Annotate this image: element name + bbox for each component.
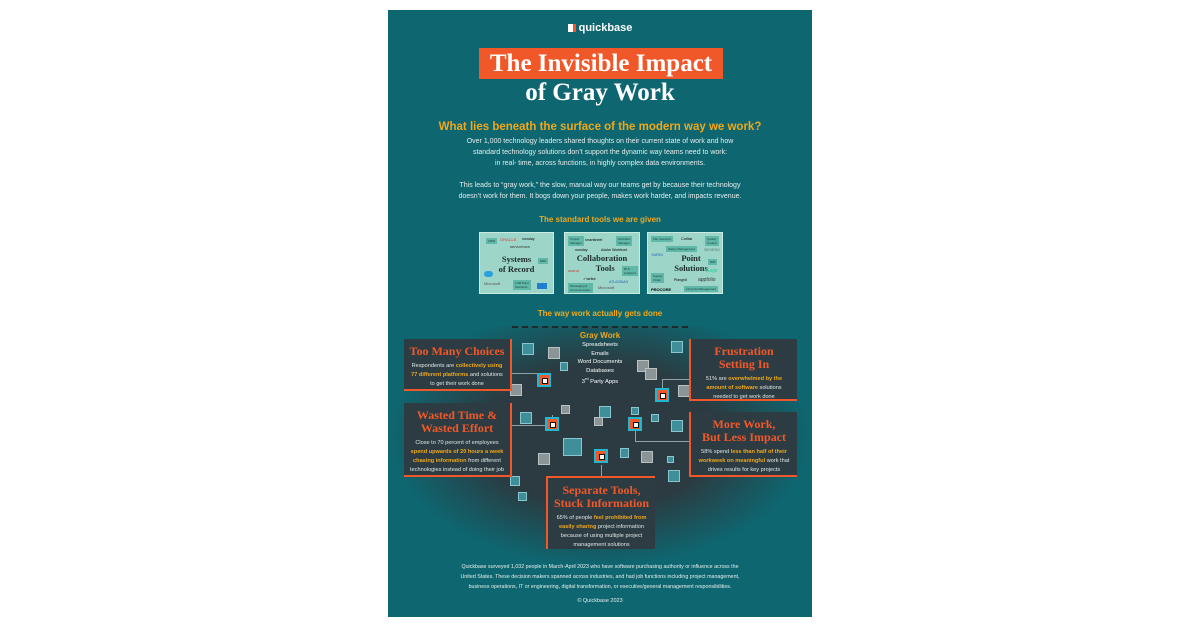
- tool card: point solutions: Supply: [653, 274, 662, 278]
- title: The Invisible Impact: [490, 50, 712, 77]
- dark gray work region: [388, 326, 812, 576]
- tool card: systems of record: ERP: [540, 259, 546, 263]
- tool card: point solutions: Safety Management: [668, 247, 695, 251]
- card: frustration: 51% are overwhelmed by the amount of software solutions needed to get work done: [706, 376, 782, 400]
- tool card: systems of record: servicenow: [510, 244, 530, 249]
- poster: [388, 10, 812, 617]
- card: too many choices: Too Many Choices: [410, 344, 504, 358]
- tool card: point solutions: Plangrid: [674, 278, 687, 282]
- tool card: systems of record: Systems: [502, 254, 531, 264]
- tool card: point solutions: Sage: [706, 268, 718, 274]
- footer methodology: United States. These decision makers spanned across industries, and had job functions including project management,: [460, 574, 740, 580]
- tool card: point solutions: SIEMENS: [704, 248, 720, 252]
- subtitle: of Gray Work: [525, 79, 675, 106]
- standard tools heading: The standard tools we are given: [539, 215, 661, 224]
- intro text: doesn’t work for them. It bogs down your people, makes work harder, and impacts revenue.: [459, 193, 741, 200]
- card: wasted time: Wasted Time &: [417, 408, 497, 422]
- tool card: collaboration tools: Analytics: [624, 271, 636, 275]
- tool card: collaboration tools: smartsheet: [585, 238, 602, 242]
- gray work list: [578, 331, 622, 385]
- gray work list: Gray Work: [580, 331, 620, 340]
- tool card: systems of record: Microsoft: [484, 281, 500, 286]
- tool card: point solutions: YARDI: [651, 252, 663, 257]
- card: wasted time: Wasted Effort: [421, 421, 493, 435]
- tool card: collaboration tools: Messaging &: [570, 284, 587, 288]
- tool card: collaboration tools: Communication: [570, 288, 591, 292]
- card: separate tools: Stuck Information: [554, 496, 649, 510]
- footer methodology: Quickbase surveyed 1,032 people in March-April 2023 who have software purchasing authority or influence across the: [461, 564, 739, 570]
- card: frustration: Setting In: [719, 357, 769, 371]
- tool card: collaboration tools: asana: [568, 268, 579, 273]
- card: more work: 58% spend less than half of their workweek on meaningful work that drives results for key projects: [699, 449, 789, 473]
- tool card: point solutions: Solutions: [674, 263, 708, 273]
- intro text: [458, 138, 741, 200]
- card: separate tools: [546, 476, 655, 549]
- card: wasted time: Close to 70 percent of employees spend upwards of 20 hours a week chasing information from different technologies instead of doing their job: [410, 440, 504, 473]
- card: separate tools: 65% of people feel prohibited from easily sharing project information because of using multiple project management solutions: [557, 515, 646, 548]
- card: wasted time: [404, 403, 512, 477]
- card: frustration: [689, 339, 797, 401]
- tool card: systems of record: Solutions: [515, 285, 527, 289]
- footer methodology: [460, 564, 740, 590]
- tool card: point solutions: appfolio: [698, 277, 716, 283]
- tool card: systems of record: [479, 232, 554, 294]
- gray work list: Emails: [591, 351, 609, 357]
- card: more work: [689, 412, 797, 477]
- intro text: in real- time, across functions, in highly complex data environments.: [495, 160, 705, 167]
- tool card: collaboration tools: Manager: [570, 241, 582, 245]
- tool card: point solutions: Chain: [653, 278, 661, 282]
- tool card: collaboration tools: ATLASSIAN: [609, 280, 628, 284]
- tool card: systems of record: ORACLE: [500, 237, 516, 242]
- gray work list: 3rd Party Apps: [582, 376, 618, 385]
- tool card: collaboration tools: BI &: [624, 267, 630, 271]
- tool card: systems of record: monday: [522, 237, 534, 241]
- card: too many choices: [404, 339, 512, 391]
- tool card: collaboration tools: Workflow: [618, 237, 630, 241]
- tool card: systems of record: LOB Point: [515, 281, 529, 285]
- tool card: collaboration tools: Tools: [596, 263, 615, 273]
- tool card: collaboration tools: Microsoft: [598, 285, 614, 290]
- card: more work: More Work,: [713, 417, 775, 431]
- tool card: collaboration tools: Adobe Workfront: [601, 248, 627, 252]
- tool card: collaboration tools: ✓wrike: [583, 276, 596, 281]
- tool card: point solutions: BIM: [710, 260, 715, 264]
- intro text: Over 1,000 technology leaders shared thoughts on their current state of work and how: [467, 138, 733, 145]
- card: more work: But Less Impact: [702, 430, 786, 444]
- icons scattered: [510, 341, 689, 501]
- card: separate tools: Separate Tools,: [562, 483, 640, 497]
- intro text: standard technology solutions don’t support the dynamic way teams need to work:: [473, 149, 727, 156]
- tool card: point solutions: Point: [681, 253, 701, 263]
- way work gets done heading: The way work actually gets done: [538, 309, 662, 318]
- tool card: collaboration tools: [564, 232, 640, 294]
- dashed line: [512, 326, 688, 328]
- tool card: point solutions: Quality: [707, 237, 716, 241]
- logo: quickbase: [579, 22, 632, 34]
- card: frustration: Frustration: [714, 344, 774, 358]
- copyright: © Quickbase 2023: [577, 598, 623, 604]
- card: too many choices: Respondents are collectively using 77 different platforms and solutions to get their work done: [411, 363, 503, 387]
- targets: [537, 373, 669, 463]
- tool card: systems of record: of Record: [499, 264, 534, 274]
- tool card: point solutions: [647, 232, 723, 294]
- tool card: point solutions: Site Selection: [653, 237, 671, 241]
- tool card: collaboration tools: Manager: [618, 241, 630, 245]
- gray work list: Spreadsheets: [582, 342, 618, 348]
- tool card: point solutions: Control: [707, 241, 717, 245]
- tool card: collaboration tools: monday: [575, 248, 587, 252]
- tool card: point solutions: PROCORE: [651, 287, 671, 292]
- intro text: This leads to “gray work,” the slow, manual way our teams get by because their technology: [460, 182, 740, 189]
- gray work list: Word Documents: [578, 359, 622, 365]
- tool card: collaboration tools: Collaboration: [577, 253, 627, 263]
- gray work list: Databases: [586, 368, 614, 374]
- tool card: collaboration tools: Project: [570, 237, 579, 241]
- tool card: point solutions: Lifecycle Management: [686, 287, 716, 291]
- tool card: systems of record: CRM: [488, 239, 495, 243]
- tool card: point solutions: Colliar: [681, 236, 692, 241]
- heading question: What lies beneath the surface of the modern way we work?: [439, 121, 761, 133]
- footer methodology: business operations, IT or engineering, digital transformation, or executive/general management responsibilities.: [469, 584, 731, 590]
- connector lines: [512, 373, 545, 374]
